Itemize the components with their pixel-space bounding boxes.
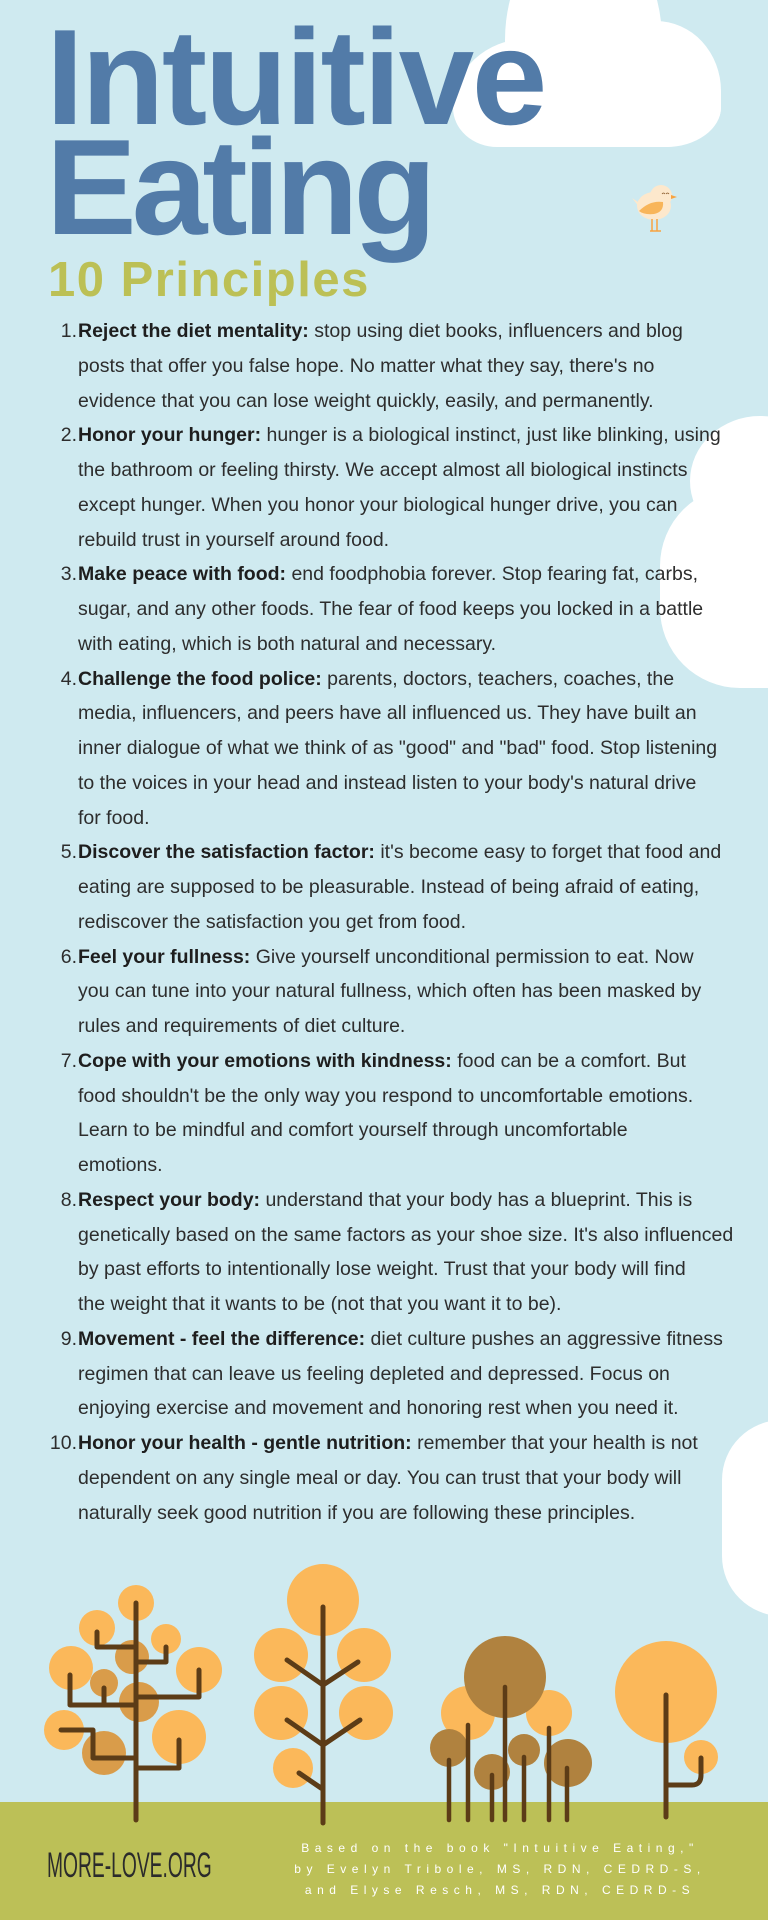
principle 2: rebuild trust in yourself around food.: [78, 528, 389, 550]
footer: credits: by Evelyn Tribole, MS, RDN, CEDRD-S,: [294, 1862, 706, 1876]
principle 4: [61, 668, 717, 828]
principles list: [50, 320, 733, 1524]
principle 2: 2.: [61, 424, 77, 446]
principle 4: inner dialogue of what we think of as "good" and "bad" food. Stop listening: [78, 737, 717, 759]
principle 6: rules and requirements of diet culture.: [78, 1015, 405, 1037]
principle 7: food shouldn't be the only way you respond to uncomfortable emotions.: [78, 1084, 693, 1106]
principle 10: Honor your health - gentle nutrition: remember that your health is not: [78, 1432, 698, 1454]
principle 6: you can tune into your natural fullness, which often has been masked by: [78, 980, 701, 1002]
subtitle: 10 Principles: [48, 253, 370, 307]
principle 2: the bathroom or feeling thirsty. We accept almost all biological instincts: [78, 459, 687, 481]
principle 3: [61, 563, 703, 655]
principle 4: 4.: [61, 668, 77, 690]
principle 4: for food.: [78, 806, 150, 828]
cloud: top right: [453, 0, 721, 147]
icon: bird: [632, 185, 677, 232]
principle 1: Reject the diet mentality: stop using diet books, influencers and blog: [78, 320, 683, 342]
principle 2: except hunger. When you honor your biological hunger drive, you can: [78, 494, 677, 516]
principle 9: regimen that can leave us feeling depleted and depressed. Focus on: [78, 1362, 670, 1384]
principle 9: [61, 1328, 723, 1419]
principle 10: naturally seek good nutrition if you are following these principles.: [78, 1502, 635, 1524]
principle 9: enjoying exercise and movement and honoring rest when you need it.: [78, 1397, 679, 1419]
tree 3: [430, 1636, 592, 1820]
title: Eating: [46, 111, 432, 263]
principle 3: 3.: [61, 563, 77, 585]
principle 3: Make peace with food: end foodphobia forever. Stop fearing fat, carbs,: [78, 563, 698, 585]
principle 1: 1.: [61, 320, 77, 342]
principle 9: 9.: [61, 1328, 77, 1350]
principle 5: eating are supposed to be pleasurable. Instead of being afraid of eating,: [78, 876, 699, 898]
principle 1: posts that offer you false hope. No matter what they say, there's no: [78, 355, 654, 377]
title: [46, 1, 545, 307]
principle 6: 6.: [61, 946, 77, 968]
principle 8: 8.: [61, 1189, 77, 1211]
principle 4: media, influencers, and peers have all influenced us. They have built an: [78, 702, 697, 724]
cloud: right lower: [722, 1420, 768, 1616]
principle 4: to the voices in your head and instead listen to your body's natural drive: [78, 772, 696, 794]
footer: credits: [294, 1841, 706, 1897]
tree 4: [615, 1641, 718, 1817]
principle 6: [61, 946, 702, 1037]
principle 5: rediscover the satisfaction you get from food.: [78, 911, 466, 933]
tree 2: [254, 1564, 393, 1823]
footer: website: MORE-LOVE.ORG: [47, 1846, 212, 1885]
principle 1: [61, 320, 683, 412]
principle 1: evidence that you can lose weight quickly, easily, and permanently.: [78, 390, 654, 412]
principle 4: Challenge the food police: parents, doctors, teachers, coaches, the: [78, 668, 674, 690]
principle 6: Feel your fullness: Give yourself unconditional permission to eat. Now: [78, 946, 694, 968]
principle 8: genetically based on the same factors as your shoe size. It's also influenced: [78, 1224, 733, 1246]
principle 2: Honor your hunger: hunger is a biological instinct, just like blinking, using: [78, 424, 721, 446]
principle 3: sugar, and any other foods. The fear of food keeps you locked in a battle: [78, 598, 703, 620]
tree 1: [44, 1585, 222, 1820]
principle 8: by past efforts to intentionally lose weight. Trust that your body will find: [78, 1258, 686, 1280]
principle 5: Discover the satisfaction factor: it's become easy to forget that food and: [78, 841, 721, 863]
footer: credits: Based on the book "Intuitive Eating,": [301, 1841, 699, 1855]
principle 7: Cope with your emotions with kindness: food can be a comfort. But: [78, 1050, 686, 1072]
principle 5: 5.: [61, 841, 77, 863]
principle 7: [61, 1050, 693, 1176]
principle 2: [61, 424, 721, 550]
title: Intuitive: [46, 1, 545, 153]
principle 3: with eating, which is both natural and necessary.: [78, 633, 496, 655]
trees illustration: [44, 1564, 718, 1826]
principle 9: Movement - feel the difference: diet culture pushes an aggressive fitness: [78, 1328, 723, 1350]
footer: credits: and Elyse Resch, MS, RDN, CEDRD-S: [305, 1883, 695, 1897]
principle 7: emotions.: [78, 1154, 163, 1176]
principle 10: 10.: [50, 1432, 77, 1454]
principle 8: Respect your body: understand that your body has a blueprint. This is: [78, 1189, 692, 1211]
principle 7: Learn to be mindful and comfort yourself through uncomfortable: [78, 1119, 628, 1141]
principle 7: 7.: [61, 1050, 77, 1072]
cloud: right middle: [660, 416, 768, 688]
principle 10: [50, 1432, 698, 1524]
principle 10: dependent on any single meal or day. You can trust that your body will: [78, 1467, 681, 1489]
principle 8: [61, 1189, 733, 1315]
principle 8: the weight that it wants to be (not that you want it to be).: [78, 1293, 561, 1315]
principle 5: [61, 841, 721, 933]
ground: [0, 1802, 768, 1920]
